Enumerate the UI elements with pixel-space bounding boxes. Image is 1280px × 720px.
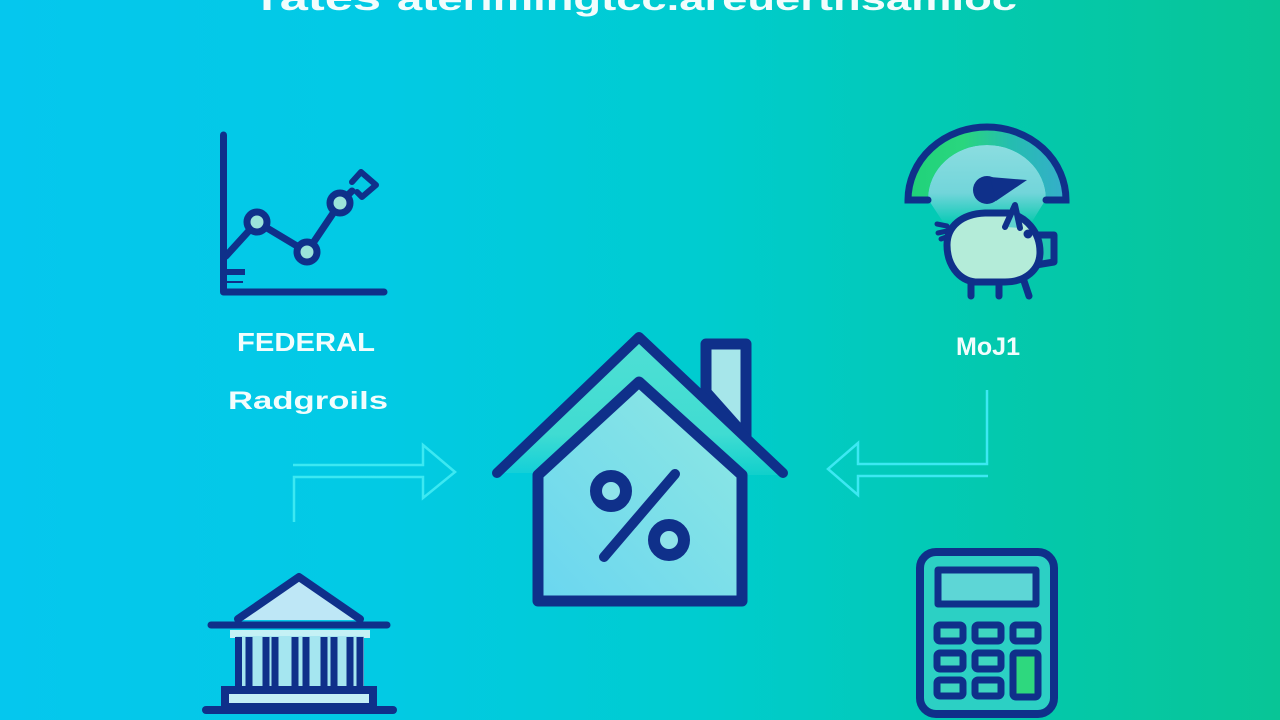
label: federal: FEDERAL [237, 327, 375, 357]
icon: calculator [920, 552, 1054, 714]
roof band [497, 337, 783, 475]
percent sign [596, 474, 684, 557]
pediment [240, 577, 358, 620]
icon: gauge with piggy bank [908, 126, 1066, 296]
column backdrop [230, 630, 370, 638]
pig body [947, 213, 1040, 282]
gauge band [908, 126, 1066, 199]
pig legs [971, 278, 1029, 296]
icon: line chart [224, 135, 384, 292]
pig eye [1024, 230, 1032, 238]
icon: house with percent [497, 337, 783, 601]
ground line [206, 706, 393, 714]
gauge needle [973, 176, 1027, 204]
pig snout [1036, 235, 1054, 265]
arrow: left to house [293, 445, 455, 522]
calculator screen [938, 570, 1036, 604]
icon: bank building [206, 577, 393, 710]
title [260, 0, 1017, 18]
columns [238, 637, 360, 688]
gauge inner [928, 145, 1046, 225]
pig ear [1005, 205, 1020, 228]
base [225, 690, 373, 707]
roof [497, 337, 783, 473]
chimney [706, 344, 746, 437]
label: garbled gauge label: MoJ1 [956, 333, 1020, 361]
house body [538, 382, 742, 601]
gauge outline [908, 127, 1066, 200]
label: garbled sublabel: Radgroils [228, 387, 388, 415]
beam [211, 622, 387, 628]
pig tail [937, 224, 949, 239]
pediment outline [238, 577, 360, 619]
calculator body [920, 552, 1054, 714]
calculator buttons [937, 625, 1038, 697]
arrow: right to house [828, 390, 988, 495]
